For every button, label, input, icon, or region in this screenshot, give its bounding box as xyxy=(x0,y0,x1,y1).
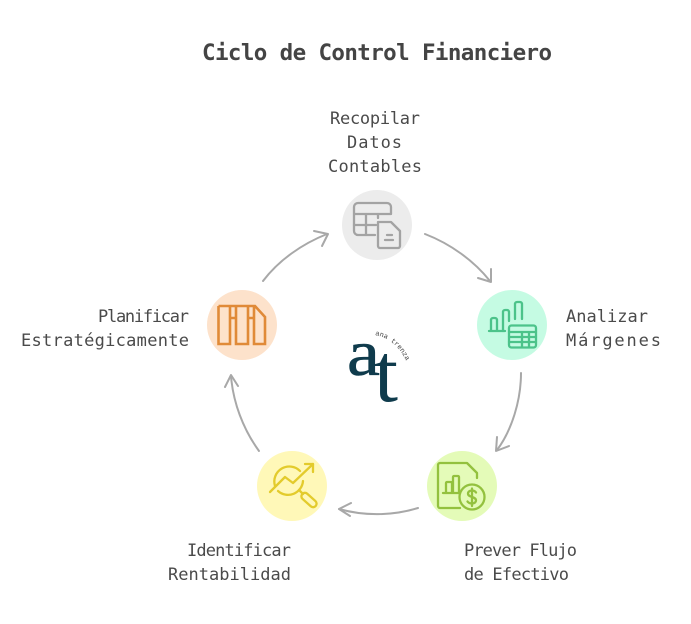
label: Recopilar Datos Contables: Recopilar xyxy=(330,109,420,129)
icon: table with document xyxy=(354,203,400,248)
icon: magnifier with trend arrow xyxy=(270,464,318,509)
title: Ciclo de Control Financiero xyxy=(202,40,552,66)
label: Prever Flujo de Efectivo: Prever Flujo xyxy=(464,541,577,561)
arrow: Recopilar to Analizar xyxy=(425,234,491,282)
arrow: Prever to Identificar xyxy=(339,503,418,516)
label: Recopilar Datos Contables: Datos xyxy=(347,133,402,153)
label: Planificar Estratégicamente: Estratégicamente xyxy=(21,331,189,351)
label: Planificar Estratégicamente: Planificar xyxy=(98,307,189,327)
label: Identificar Rentabilidad: Rentabilidad xyxy=(168,565,291,585)
label: Recopilar Datos Contables xyxy=(328,109,422,177)
node: Recopilar Datos Contables xyxy=(342,190,412,260)
label: Analizar Márgenes xyxy=(566,307,661,351)
arrow: Analizar to Prever xyxy=(496,373,521,451)
icon: report with dollar coin xyxy=(438,463,484,510)
logo letter a: a xyxy=(347,317,380,390)
label: Analizar Márgenes: Analizar xyxy=(566,307,648,327)
icon: folded columns xyxy=(218,306,265,344)
logo letter t: t xyxy=(374,327,398,420)
label: Recopilar Datos Contables: Contables xyxy=(328,157,422,177)
node: Planificar Estratégicamente xyxy=(207,290,277,360)
arrow: Planificar to Recopilar xyxy=(263,231,328,281)
label: Identificar Rentabilidad xyxy=(168,541,291,585)
label: Planificar Estratégicamente xyxy=(21,307,189,351)
node: Analizar Márgenes xyxy=(477,290,547,360)
node: Identificar Rentabilidad xyxy=(257,451,327,521)
icon: bars with table xyxy=(489,302,536,348)
label: Prever Flujo de Efectivo: de Efectivo xyxy=(464,565,569,585)
label: Identificar Rentabilidad: Identificar xyxy=(187,541,291,561)
node: Prever Flujo de Efectivo xyxy=(427,451,497,521)
arrow: Identificar to Planificar xyxy=(225,375,259,451)
label: Prever Flujo de Efectivo xyxy=(464,541,577,585)
label: Analizar Márgenes: Márgenes xyxy=(566,331,661,351)
logo: ana trenza xyxy=(347,317,409,420)
logo tagline: ana trenza xyxy=(376,332,409,360)
